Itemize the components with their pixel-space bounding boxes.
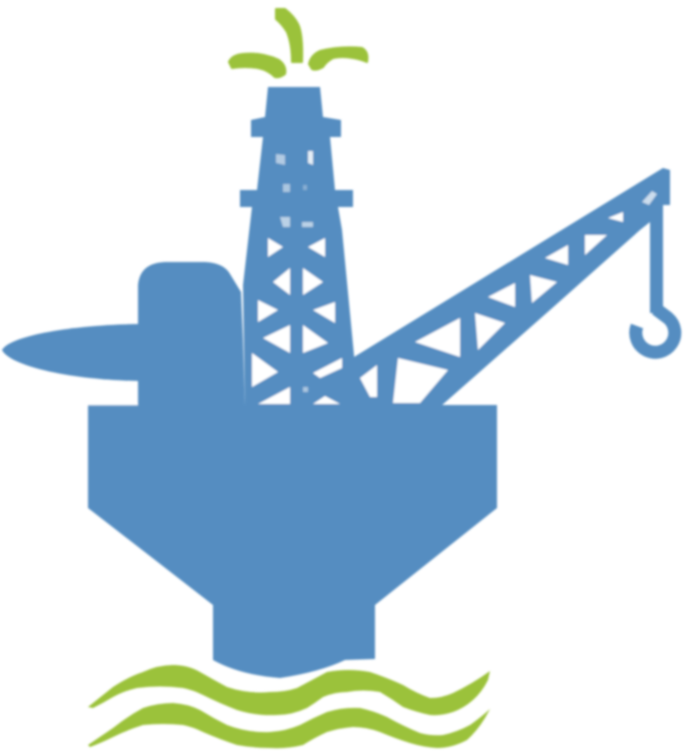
icon: crane hook bbox=[636, 309, 675, 352]
deck block bbox=[138, 262, 245, 406]
crane cable bbox=[650, 205, 663, 313]
tower silhouette bbox=[240, 87, 358, 406]
icon: flame bbox=[229, 9, 367, 77]
tower and boom lattice openings bbox=[252, 151, 657, 404]
helipad wing bbox=[2, 324, 140, 381]
derrick tower, crane and hull bbox=[2, 87, 670, 678]
hull bbox=[88, 405, 497, 678]
crane boom bbox=[354, 168, 670, 406]
hull deck line bbox=[88, 404, 138, 406]
icon: upper wave bbox=[88, 665, 490, 715]
icon: lower wave bbox=[88, 703, 490, 748]
